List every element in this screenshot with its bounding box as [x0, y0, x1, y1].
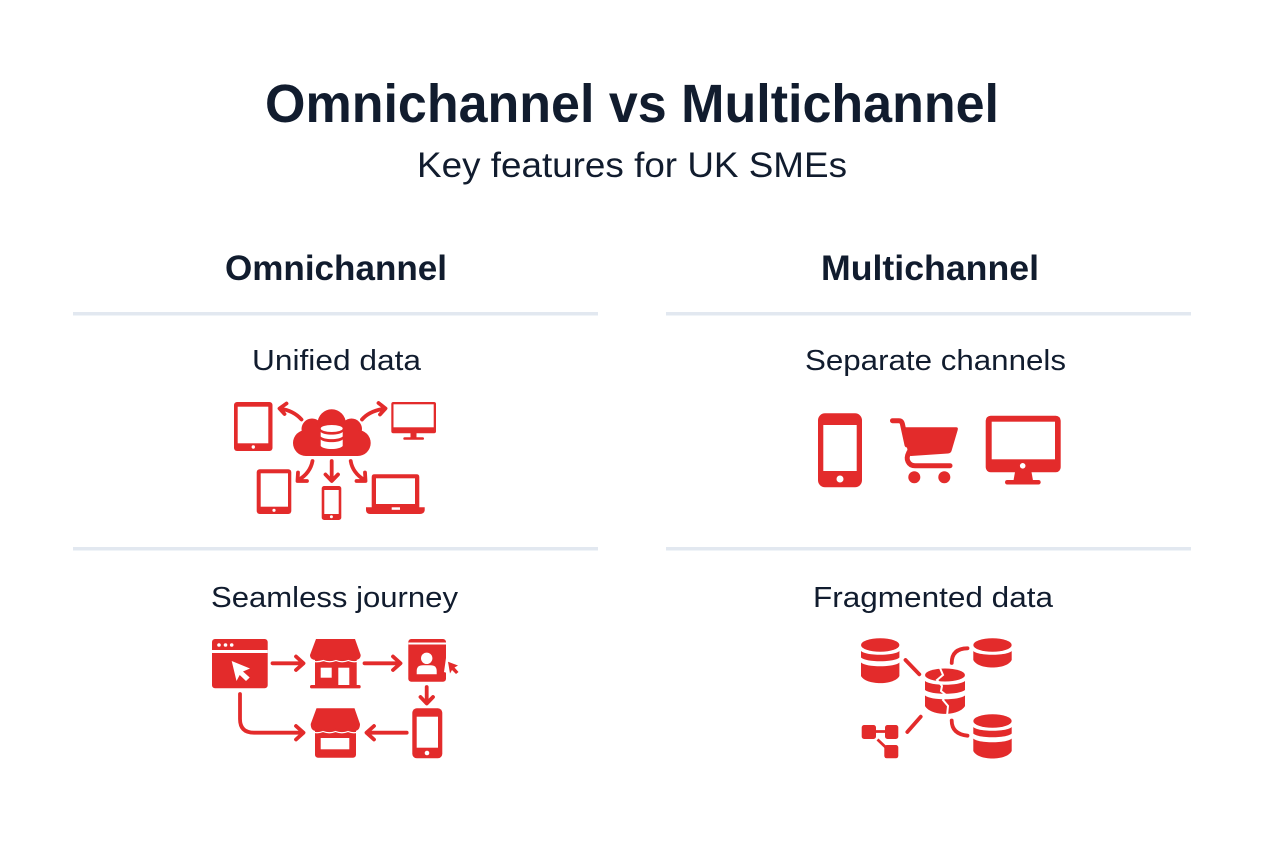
arrow: cloud to phone: [326, 461, 338, 481]
icon: seamless journey flow: [212, 639, 461, 758]
connector: left database to centre: [906, 660, 919, 674]
label: Seamless journey: Seamless journey: [211, 582, 459, 614]
connector: centre to bottom right: [952, 720, 968, 736]
icon: phone bottom: [322, 486, 341, 520]
arrow: browser to store: [272, 656, 304, 670]
icon: fragmented data: [861, 638, 1012, 758]
arrow: cloud to laptop: [351, 461, 366, 481]
icon: cracked central database: [925, 668, 965, 716]
label: Unified data: Unified data: [252, 345, 422, 377]
icon: cloud with database: [293, 409, 371, 456]
icon: small database top right: [973, 638, 1012, 668]
heading: Multichannel: Multichannel: [821, 249, 1039, 288]
label: Separate channels: Separate channels: [805, 345, 1066, 377]
icon: large database left: [861, 638, 899, 683]
icon: phone: [412, 708, 442, 758]
connector: centre to top right: [952, 648, 968, 663]
icon: desktop computer: [986, 416, 1061, 484]
heading: Omnichannel: Omnichannel: [225, 249, 447, 288]
icon: browser window with cursor: [212, 639, 268, 688]
icon: shopping cart: [892, 421, 958, 483]
connector: nodes to centre: [907, 717, 921, 732]
icon: smartphone: [818, 413, 862, 487]
arrow: store to profile: [364, 656, 400, 670]
label: Fragmented data: Fragmented data: [813, 582, 1054, 614]
icon: database bottom right: [973, 714, 1012, 758]
subtitle: Key features for UK SMEs: [417, 146, 847, 185]
icon: desktop monitor top right: [391, 402, 436, 440]
title: Omnichannel vs Multichannel: [265, 74, 999, 134]
icon: store with window: [311, 708, 360, 758]
arrow: profile to phone: [420, 687, 433, 704]
icon: linked nodes: [862, 725, 898, 758]
icon: store with door: [310, 639, 361, 688]
icon: unified data cloud network: [234, 402, 436, 520]
icon: separate channels group: [818, 413, 1061, 487]
icon: tablet top left: [234, 402, 272, 451]
arrow: phone to store: [366, 726, 407, 740]
arrow: cloud to tablet: [280, 404, 302, 420]
arrow: browser to store below: [240, 694, 304, 740]
arrow: cloud to tablet below: [298, 461, 312, 481]
icon: laptop: [366, 474, 425, 514]
icon: tablet bottom: [257, 469, 291, 514]
icon: profile card with cursor: [408, 639, 461, 682]
arrow: cloud to monitor: [362, 403, 386, 420]
